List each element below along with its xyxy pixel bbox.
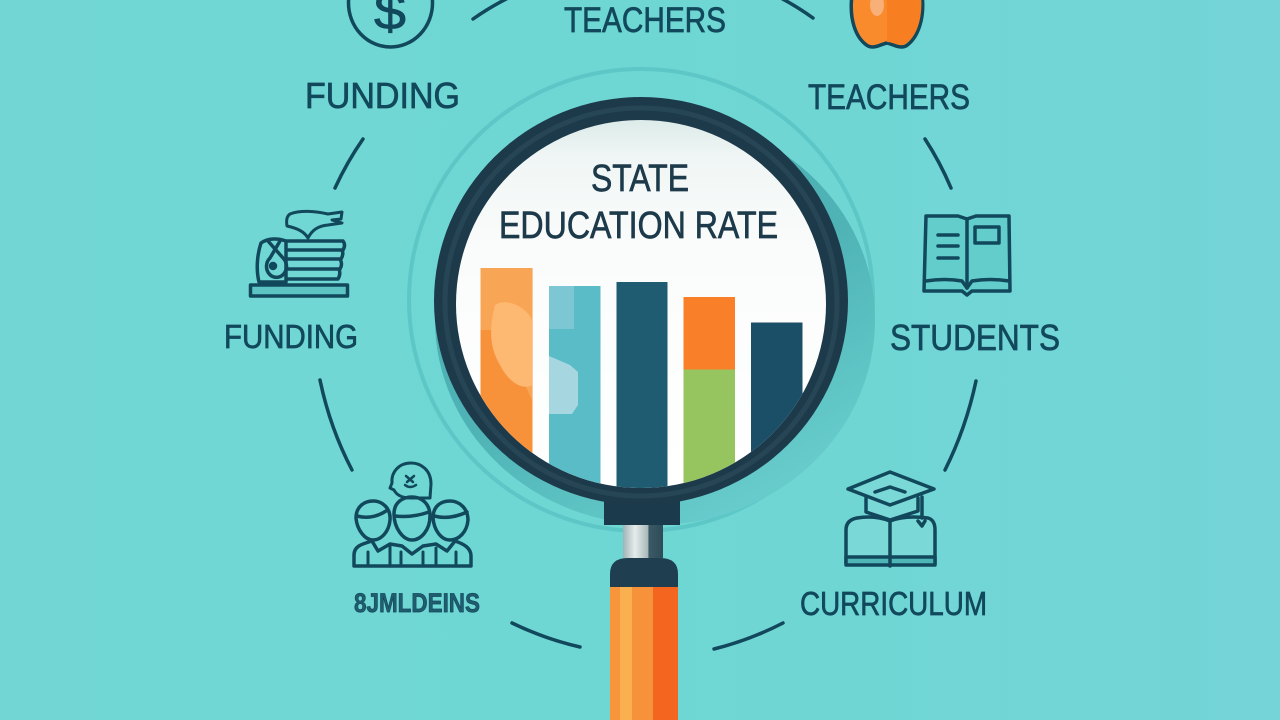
label: funding left: FUNDING bbox=[224, 318, 358, 355]
faint outer ring bbox=[409, 69, 873, 531]
icon: apple bbox=[851, 0, 923, 47]
handle cap bbox=[610, 558, 678, 587]
bar chart bbox=[480, 268, 802, 508]
lens heading bbox=[499, 158, 778, 247]
icon: students group bbox=[354, 463, 471, 566]
circular arc segments bbox=[320, 0, 976, 649]
label: students right: STUDENTS bbox=[890, 317, 1060, 358]
icon: books and money bbox=[250, 211, 348, 296]
collar bbox=[604, 500, 680, 525]
metal neck bbox=[623, 524, 663, 558]
label: garbled students: 8JMLDEINS bbox=[354, 588, 480, 618]
lens glass bbox=[456, 120, 826, 488]
label: curriculum: CURRICULUM bbox=[800, 585, 987, 622]
handle shaft bbox=[610, 587, 678, 720]
lens rim highlight bbox=[445, 108, 837, 496]
label: funding top: FUNDING bbox=[305, 75, 460, 116]
icon: graduation cap and book bbox=[846, 472, 935, 566]
lens heading: STATE bbox=[591, 158, 689, 200]
magnifying glass bbox=[409, 69, 875, 720]
lens rim bbox=[434, 97, 848, 505]
icon: dollar coin bbox=[348, 0, 432, 47]
lens drop shadow bbox=[435, 115, 875, 525]
label: teachers right: TEACHERS bbox=[808, 78, 970, 117]
lens heading: EDUCATION RATE bbox=[499, 205, 778, 247]
label: top teachers: TEACHERS bbox=[564, 1, 726, 40]
icon: open book bbox=[924, 216, 1010, 295]
